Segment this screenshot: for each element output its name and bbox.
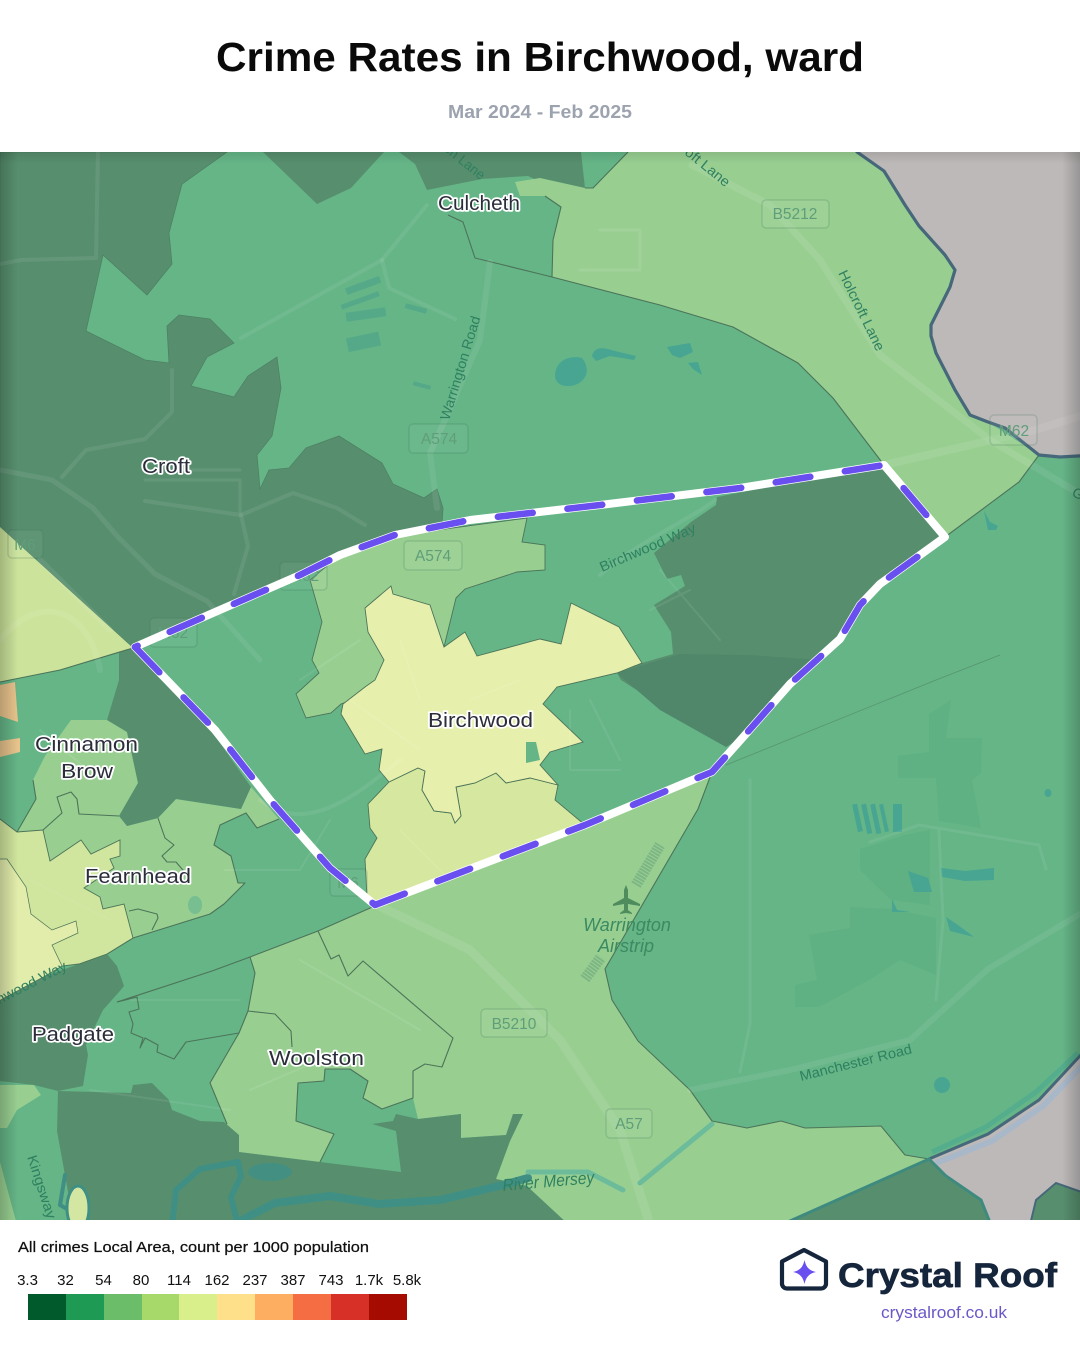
buildings: Culcheth campus cluster (341, 276, 431, 390)
region: Fearnhead lime (0, 819, 133, 1003)
river Mersey (60, 1124, 712, 1225)
region: Birchwood pale core (341, 586, 642, 823)
place labels: Birchwood (428, 709, 533, 732)
place labels: Brow (61, 760, 113, 783)
legend scale numbers: 237 (242, 1272, 268, 1289)
icon: house with star (782, 1250, 826, 1289)
region: ward light green (296, 518, 545, 718)
region: top dark patches (263, 152, 585, 204)
road labels: Kingsway (24, 1153, 60, 1221)
place labels: Culcheth (438, 192, 520, 215)
region: south-west dark area (57, 1083, 569, 1225)
road number shields: B5210 (492, 1016, 537, 1033)
title: Crime Rates in Birchwood, ward (216, 34, 864, 80)
region: west lime wedge (0, 527, 133, 682)
logo wordmark: Crystal Roof (838, 1257, 1058, 1295)
road number shields: M6 (337, 875, 359, 892)
road labels: Common Lane (410, 115, 489, 183)
place labels (32, 192, 533, 1070)
road number shields: A574 (421, 431, 457, 448)
legend scale numbers: 3.3 (17, 1272, 38, 1289)
region: bottom right dark strip (781, 1159, 991, 1225)
region: Cinnamon Brow and Fearnhead light (17, 720, 279, 954)
logo: Crystal Roof (782, 1250, 1058, 1322)
region: west strip patches (0, 1085, 41, 1128)
legend scale numbers: 114 (167, 1272, 191, 1289)
region: Padgate dark (0, 954, 124, 1091)
region: grey outside south-east (932, 1058, 1080, 1220)
airstrip label: Warrington (583, 915, 671, 935)
legend scale numbers: 5.8k (393, 1272, 422, 1289)
place labels: Cinnamon (35, 733, 138, 756)
road labels: Holcroft Lane (655, 122, 734, 190)
road labels: Warrington Road (437, 314, 483, 422)
place labels: Woolston (269, 1047, 364, 1070)
airstrip runways (585, 845, 660, 979)
legend (17, 1239, 422, 1320)
airstrip label: Airstrip (597, 936, 654, 956)
road labels: River Mersey (502, 1168, 596, 1195)
place labels: Padgate (32, 1023, 114, 1046)
oval lake (67, 1186, 89, 1230)
ward boundary: white line with purple dashes (135, 465, 945, 905)
legend scale numbers: 743 (318, 1272, 344, 1289)
legend scale numbers: 1.7k (355, 1272, 384, 1289)
region: south light area (210, 772, 929, 1225)
place labels: Croft (142, 455, 190, 478)
icon: airplane (613, 885, 640, 914)
subtitle: date range: Mar 2024 - Feb 2025 (448, 101, 632, 122)
water bodies (188, 343, 1052, 1181)
road number shields: A574 (415, 548, 451, 565)
road number shields: M6 (14, 537, 36, 554)
region: ward dark east (617, 465, 945, 747)
road number shields: M62 (289, 568, 319, 585)
road number shields: B5212 (773, 206, 817, 223)
region: grey outside north-east (850, 140, 1080, 457)
website url: crystalroof.co.uk (881, 1304, 1008, 1322)
road number shields: M62 (158, 625, 188, 642)
legend scale numbers (17, 1272, 422, 1289)
road number shields (8, 200, 1037, 1138)
legend title: All crimes Local Area, count per 1000 population (18, 1239, 369, 1256)
airstrip label (583, 915, 671, 956)
legend scale numbers: 54 (95, 1272, 112, 1289)
region: north-east light band (515, 140, 1039, 537)
road labels: Holcroft Lane (835, 267, 888, 354)
road labels: Manchester Road (798, 1041, 913, 1084)
region: north-west higher shade (0, 152, 443, 648)
fields: subtle east ward texture (795, 700, 982, 1007)
road labels: Birchwood Way (597, 520, 698, 575)
road number shields: A57 (615, 1116, 643, 1133)
legend scale numbers: 32 (57, 1272, 74, 1289)
road number shields: M62 (999, 423, 1029, 440)
legend scale numbers: 80 (133, 1272, 149, 1289)
region: ward lime south (365, 768, 585, 905)
place labels: Fearnhead (85, 865, 191, 888)
legend scale numbers: 387 (280, 1272, 306, 1289)
roads: faint network (0, 152, 1080, 1110)
region: orange patches (0, 682, 20, 757)
legend colour bar (28, 1294, 407, 1320)
legend scale numbers: 162 (204, 1272, 230, 1289)
